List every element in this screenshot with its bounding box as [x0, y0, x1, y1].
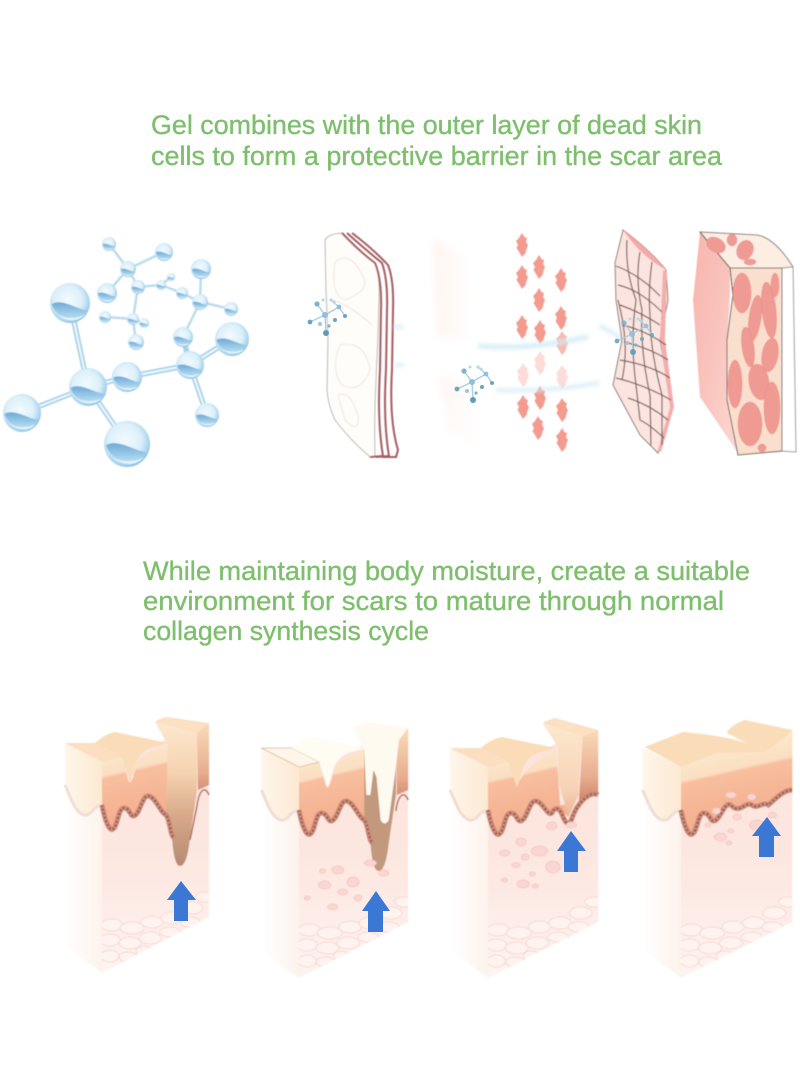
arrow: up stage 4	[752, 817, 781, 857]
icon: small molecule on sheet	[308, 298, 347, 336]
blue wisps	[395, 326, 622, 390]
skin stage 2: gel filling scar	[261, 722, 413, 978]
illustration: gel passing through scattered cells	[395, 233, 622, 452]
skin stage 3: scar lifting	[450, 718, 603, 978]
ghost layer	[433, 237, 480, 450]
pink cell blobs	[516, 233, 568, 452]
collagen bubbles	[499, 822, 577, 888]
heading: moisture and collagen: While maintaining body moisture, create a suitable	[143, 556, 750, 586]
collagen bubbles	[304, 860, 389, 910]
heading: moisture and collagen: collagen synthesis cycle	[143, 616, 429, 646]
illustration: muscle block	[693, 232, 796, 455]
skin stage 4: smoothed scar	[643, 720, 797, 978]
heading: gel barrier: cells to form a protective barrier in the scar area	[151, 141, 723, 171]
illustration: blue molecule	[3, 237, 249, 467]
skin stage 1: deep scar	[65, 717, 214, 973]
illustration: layered skin sheet	[325, 233, 398, 457]
icon: small molecule	[455, 365, 494, 403]
heading: moisture and collagen	[143, 556, 750, 646]
heading: gel barrier: Gel combines with the outer layer of dead skin	[151, 110, 702, 140]
icon: small molecule on mesh	[615, 317, 654, 355]
arrow: up stage 1	[167, 881, 196, 921]
illustration: mesh sheet	[613, 230, 674, 453]
arrow: up stage 2	[362, 891, 390, 932]
heading: moisture and collagen: environment for scars to mature through normal	[143, 586, 724, 616]
arrow: up stage 3	[557, 831, 586, 872]
collagen bubbles	[705, 792, 777, 845]
heading: gel barrier	[151, 110, 723, 171]
